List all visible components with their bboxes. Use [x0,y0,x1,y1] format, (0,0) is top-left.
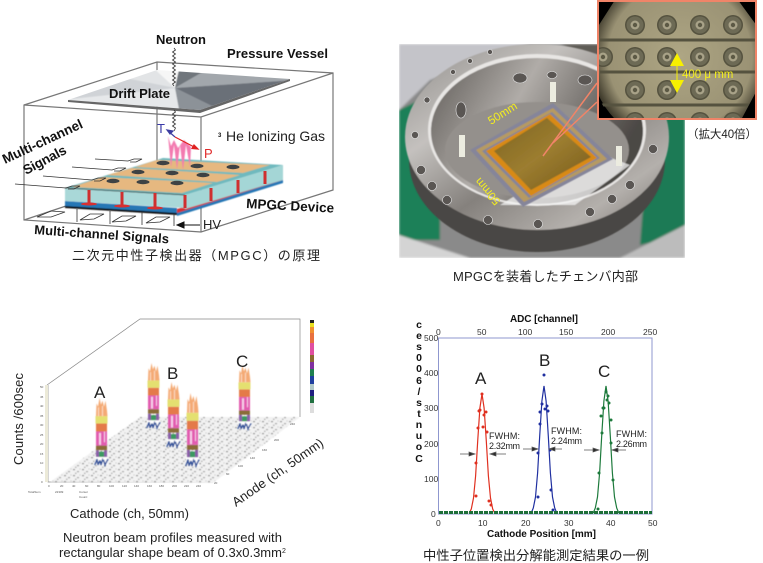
tick labels: 60 [85,484,89,488]
caption: beam profile: Neutron beam profiles measured with [63,530,282,545]
tick labels: 20 [214,481,218,485]
tick labels: 45 [40,395,44,399]
bottom axis labels: 10 [478,518,488,528]
fit curve B [531,386,557,513]
axis title: counts stacked: s [416,397,422,409]
inset frame [598,1,756,119]
diagram labels: He Ionizing Gas [226,128,325,144]
panel: chamber photo [399,44,685,258]
magnified surface [599,2,755,118]
scale arrow [670,53,684,93]
diagram labels: T [157,121,165,136]
tick labels: 200 [172,484,177,488]
tick labels: 160 [262,448,267,452]
tick labels: 220 [184,484,189,488]
signal lines bottom [37,209,174,226]
tick labels: 0 [48,484,50,488]
axis label: cathode: Cathode (ch, 50mm) [70,506,189,521]
hole grid [599,15,743,118]
baseline scatter [439,511,652,514]
tick labels: 22309 [55,490,64,494]
drift plate [68,70,290,113]
tick labels: 25 [40,433,44,437]
peak labels: A [475,369,487,388]
left axis labels: 100 [424,474,438,484]
tick labels: 50 [40,385,44,389]
tick labels: 80 [97,484,101,488]
tick labels: Count: [79,495,88,499]
axis title: counts stacked: e [416,330,422,342]
tick labels: 20 [60,484,64,488]
axis title: counts stacked: o [416,441,422,453]
triton arrow [167,130,175,137]
FWHM annotations: 2.24mm [551,436,582,446]
photo background [399,44,685,258]
diagram labels: Neutron [156,32,206,47]
fit curve A [469,394,495,513]
top axis labels [436,327,657,337]
top axis labels: 0 [436,327,441,337]
proton arrow [175,137,198,149]
peak labels: A [94,383,106,402]
axis title: counts stacked: 0 [416,352,422,364]
top axis labels: 50 [477,327,487,337]
bottom axis labels: 50 [648,518,658,528]
plot frame [438,338,652,514]
diagram labels: Multi-channel Signals [34,222,170,246]
caption: chamber: MPGCを装着したチェンバ内部 [453,269,638,284]
pads [106,161,240,185]
peak labels: B [539,351,550,370]
axis title: counts stacked [415,319,423,465]
axis title: counts stacked: 6 [416,375,422,387]
axis title: counts stacked: t [417,408,421,420]
flange bolt holes [412,50,658,228]
axis title: counts stacked: u [416,430,422,442]
peak labels: C [598,362,610,381]
color legend [310,320,314,413]
top axis labels: 250 [643,327,657,337]
tick labels: 240 [290,422,295,426]
dimension labels: 50mm [473,175,503,207]
y scale strip [45,385,48,482]
top axis labels: 100 [518,327,532,337]
lower electrode pads [81,202,163,210]
HV arrow [177,222,200,228]
left axis labels: 300 [424,403,438,413]
axis title: counts stacked: / [418,386,421,398]
data points B [536,374,554,512]
scale label: 400 μ mm [682,69,733,81]
axis title: counts stacked: s [416,341,422,353]
chamber flange [405,44,669,252]
tick labels: 200 [274,438,279,442]
FWHM annotations: 2.32mm [489,441,520,451]
device body [65,158,283,216]
axis label: counts: Counts /600sec [11,372,26,465]
ionization plume [168,136,191,170]
FWHM annotations: FWHM: [551,426,582,436]
caption: principle: 二次元中性子検出器（MPGC）の原理 [72,248,320,263]
caption: magnification: （拡大40倍） [687,127,757,141]
panel: MPGC principle diagram [0,32,335,263]
left axis labels: 200 [424,439,438,449]
tick labels: 180 [159,484,164,488]
peak labels [94,352,248,402]
FWHM annotations: FWHM: [489,431,520,441]
zoom lines [543,83,597,156]
panel: 40x magnified inset [597,0,757,120]
diagram labels: Signals [20,142,69,178]
axis title: ADC: ADC [channel] [510,314,578,325]
caption: beam profile: rectangular shape beam of 0.3x0.3mm [59,545,282,560]
diagram labels: Pressure Vessel [227,46,328,61]
peak labels: B [167,364,178,383]
bottom axis labels [436,518,658,528]
tick labels: 60 [226,472,230,476]
panel: 3D beam profile chart [11,319,326,521]
axis label: anode: Anode (ch, 50mm) [229,435,326,509]
tick labels: 140 [250,456,255,460]
left axis labels: 0 [431,509,436,519]
tick labels: 100 [109,484,114,488]
tick labels: 10 [40,461,44,465]
MPGC board [470,103,613,207]
caption: resolution: 中性子位置検出分解能測定結果の一例 [423,548,649,563]
diagram labels: HV [203,217,221,232]
tick labels [28,385,295,499]
tick labels: 0 [41,480,43,484]
bottom axis labels: 40 [606,518,616,528]
bottom axis labels: 20 [521,518,531,528]
diagram labels: P [204,146,213,161]
tick labels: TotalSum [28,490,41,494]
support posts [459,82,622,166]
diagram labels: MPGC Device [246,196,335,216]
tick labels: 35 [40,414,44,418]
FWHM arrows [460,447,626,456]
signal lines top [15,159,142,189]
dimension labels: 50mm [486,100,520,128]
tick labels: 15 [40,452,44,456]
diagram labels: Multi-channel [0,116,85,167]
tick labels: 40 [72,484,76,488]
tick labels: 240 [196,484,201,488]
bottom axis labels: 30 [564,518,574,528]
axis title: counts stacked: c [416,319,422,331]
tick labels: 120 [122,484,127,488]
data points C [596,390,614,510]
caption: beam profile: 2 [282,548,286,555]
tick labels: 20 [40,442,44,446]
data points A [474,392,492,506]
tick labels: 40 [40,404,44,408]
diagram labels [0,32,335,246]
top axis labels: 150 [559,327,573,337]
panel: position resolution chart [415,314,658,540]
peak labels: C [236,352,248,371]
top axis labels: 200 [601,327,615,337]
fit curve C [593,386,619,513]
diagram labels: Drift Plate [109,86,170,101]
tick labels: 140 [134,484,139,488]
tick labels: 100 [238,464,243,468]
diagram labels: 3 [218,133,222,139]
tick labels: 5 [41,471,43,475]
tick labels: Cursor [79,490,88,494]
strip electrodes [600,40,757,105]
tick labels: 160 [147,484,152,488]
beam spots [95,363,251,466]
axis title: counts stacked: n [416,419,422,431]
left axis labels: 500 [424,333,438,343]
tick labels: 30 [40,423,44,427]
pillars [89,171,265,208]
peak labels [475,351,610,388]
pressure vessel wireframe [24,62,333,232]
neutron track [172,48,176,131]
FWHM annotations: FWHM: [616,429,647,439]
dimension labels [476,104,518,206]
MPGC device [65,158,283,216]
FWHM annotations [489,426,647,451]
axis title: cathode position: Cathode Position [mm] [487,529,596,540]
axis title: counts stacked: 0 [416,363,422,375]
axis title: counts stacked: C [415,453,423,465]
bottom axis labels: 0 [436,518,441,528]
chart frame [47,319,300,482]
caption: beam profile [59,530,286,560]
left axis labels [424,333,438,519]
left axis labels: 400 [424,368,438,378]
FWHM annotations: 2.26mm [616,439,647,449]
noise floor [50,417,300,483]
